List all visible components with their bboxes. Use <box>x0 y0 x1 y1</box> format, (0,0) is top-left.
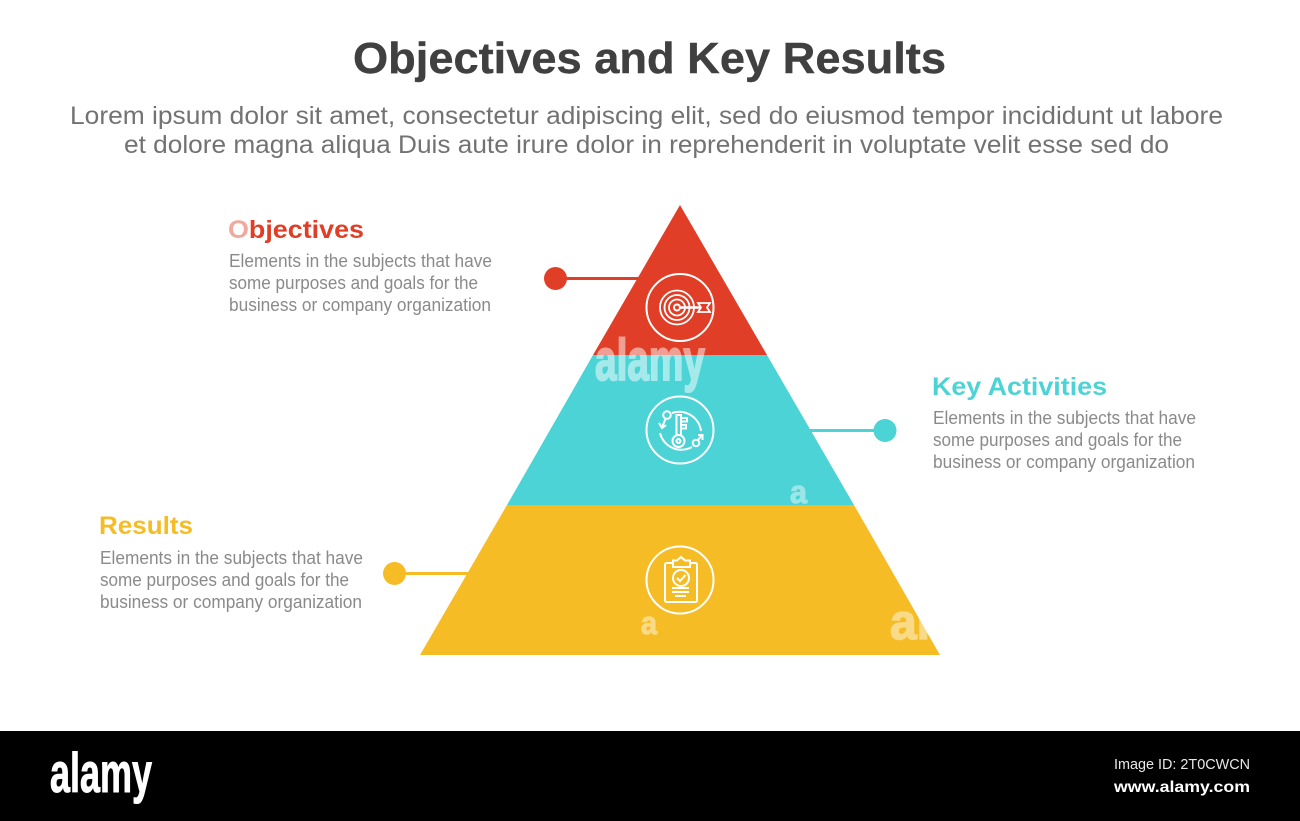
connector: key activities <box>810 419 896 442</box>
text block: objectives: Elements in the subjects that have <box>229 251 492 271</box>
title: Objectives and Key Results <box>353 34 946 83</box>
text block: key activities: business or company organization <box>933 452 1195 472</box>
text block: key activities <box>932 373 1196 472</box>
footer logo: alamy <box>50 741 152 804</box>
connector: results <box>383 562 468 585</box>
text block: results: some purposes and goals for the <box>100 570 349 590</box>
text block: objectives <box>228 216 492 315</box>
text block: key activities: Key Activities <box>932 373 1107 401</box>
watermark fragments: a <box>790 474 807 510</box>
watermark fragments: al <box>890 594 930 650</box>
text block: key activities: Elements in the subjects that have <box>933 408 1196 428</box>
text block: results <box>99 512 363 612</box>
text block: results: Results <box>99 512 193 540</box>
pyramid tier: results <box>420 505 940 655</box>
pyramid tier: objectives <box>593 205 767 355</box>
text block: objectives: business or company organization <box>229 295 491 315</box>
connector: objectives <box>544 267 640 290</box>
subtitle text block: Lorem ipsum dolor sit amet, consectetur adipiscing elit, sed do eiusmod tempor incididunt ut labore <box>70 102 1223 130</box>
pyramid chart <box>420 205 940 655</box>
icon: target with arrow <box>646 274 714 341</box>
text block: results: Elements in the subjects that have <box>100 548 363 568</box>
watermark fragments <box>228 219 930 650</box>
subtitle text block: et dolore magna aliqua Duis aute irure dolor in reprehenderit in voluptate velit esse sed do <box>124 131 1169 159</box>
subtitle text block <box>70 102 1223 159</box>
image id: Image ID: 2T0CWCN <box>1114 756 1250 773</box>
website: www.alamy.com <box>1113 779 1250 796</box>
icon: clipboard checklist <box>646 546 714 614</box>
text block: objectives: Objectives <box>228 216 364 244</box>
footer bar <box>0 731 1300 821</box>
text block: objectives: some purposes and goals for the <box>229 273 478 293</box>
text block: key activities: some purposes and goals for the <box>933 430 1182 450</box>
watermark fragments: alamy <box>595 328 705 393</box>
watermark fragments: a <box>641 605 657 641</box>
pyramid tier: key activities <box>507 355 854 505</box>
icon: key with cycle arrows <box>646 396 714 464</box>
text block: results: business or company organization <box>100 592 362 612</box>
